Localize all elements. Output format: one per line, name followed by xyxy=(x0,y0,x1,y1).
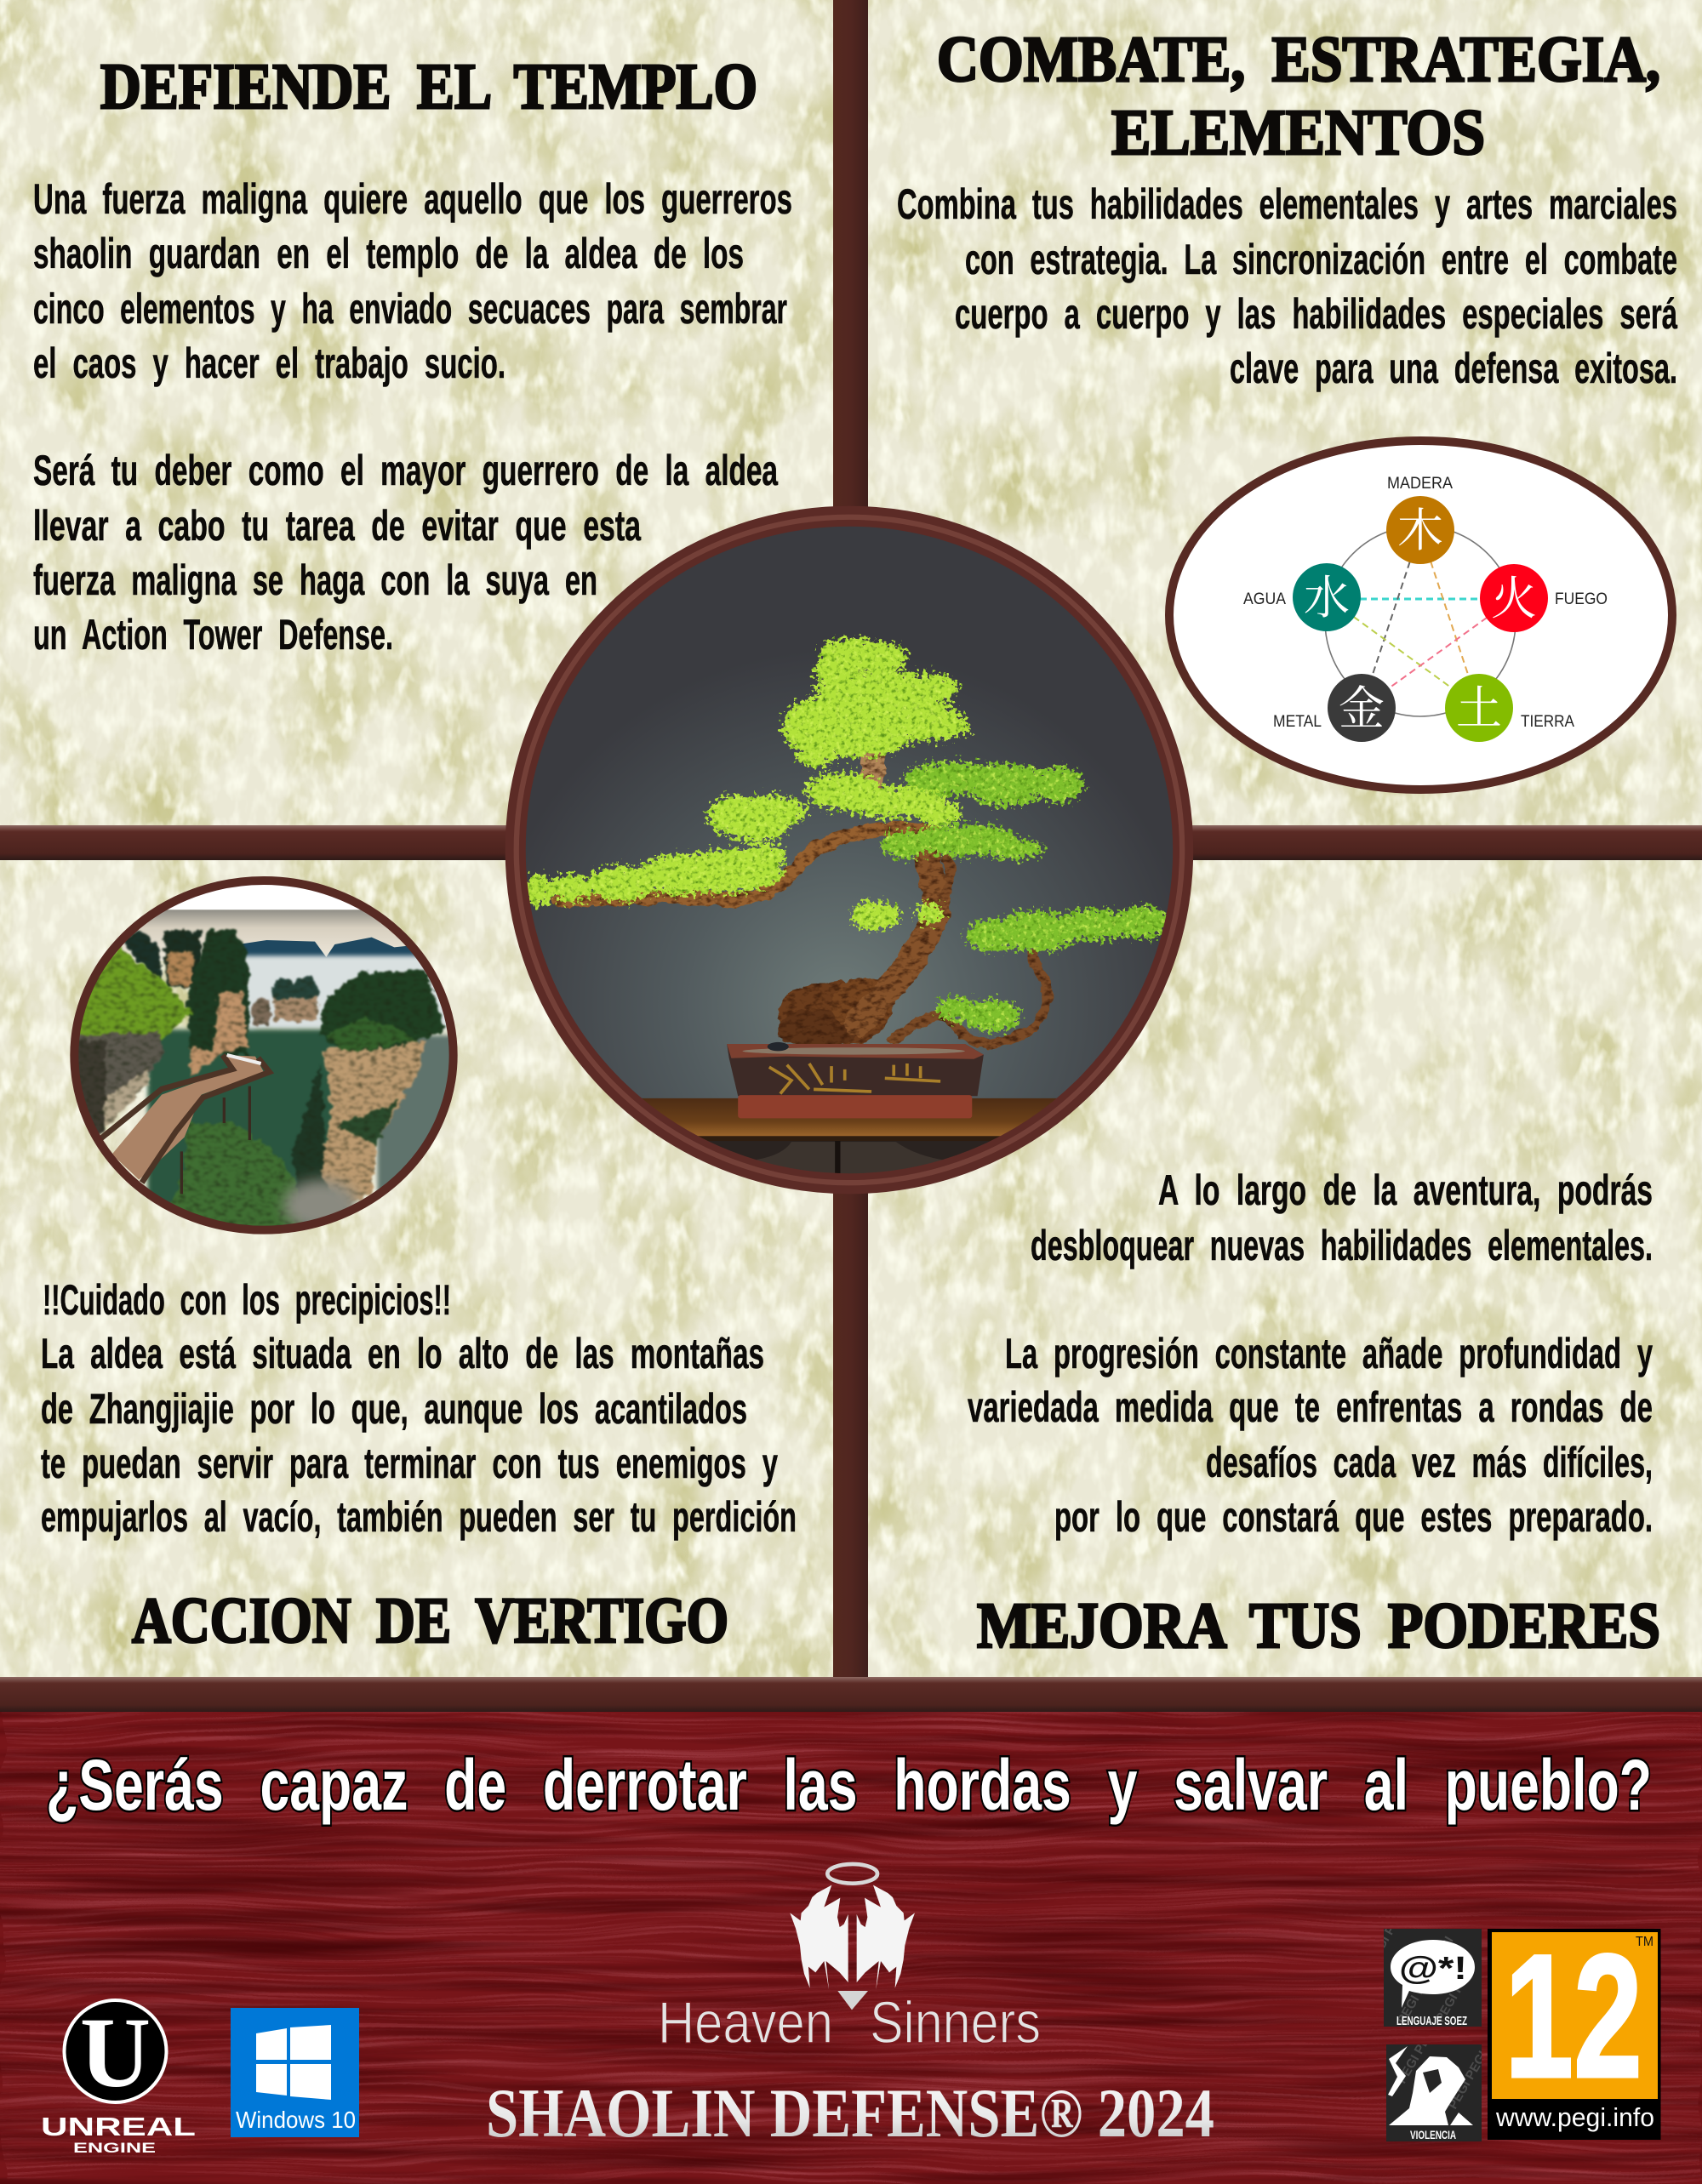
central image: bonsai xyxy=(502,502,1200,1200)
text block xyxy=(41,1276,797,1541)
heading: ELEMENTOS xyxy=(1111,97,1485,168)
far mountains xyxy=(238,938,448,967)
pegi: lenguaje soez: @*! xyxy=(1399,1951,1467,1987)
panel: combate, estrategia, elementos xyxy=(897,24,1677,392)
wordmark: UNREAL xyxy=(41,2112,196,2141)
text block xyxy=(33,175,792,659)
right haze xyxy=(377,1035,462,1234)
fist icon xyxy=(1388,2046,1473,2125)
heading xyxy=(937,24,1660,168)
text block: fuerza maligna se haga con la suya en xyxy=(33,556,597,604)
ring frame xyxy=(506,507,1192,1193)
pegi: lenguaje soez xyxy=(1365,1874,1482,2028)
text block: Una fuerza maligna quiere aquello que los guerreros xyxy=(33,175,792,223)
node: madera: 木 xyxy=(1397,505,1443,556)
left foliage and cliff xyxy=(68,947,191,1134)
panel: mejora tus poderes xyxy=(968,1166,1660,1662)
foliage bright tiers xyxy=(523,638,969,930)
green valley xyxy=(147,1029,346,1234)
node: tierra: 土 xyxy=(1456,683,1502,734)
mist valley xyxy=(232,955,460,1029)
panel: defiende el templo xyxy=(33,51,792,659)
bonsai scene xyxy=(528,633,1166,1174)
pegi: age rating 12: www.pegi.info xyxy=(1495,2102,1654,2132)
circular photo: zhangjiajie xyxy=(68,876,462,1234)
emblem: halo and wings xyxy=(790,1864,915,2010)
labels: FUEGO xyxy=(1555,590,1608,608)
right pillar xyxy=(292,970,445,1208)
background: parchment xyxy=(0,0,1702,1719)
logo: unreal engine: U xyxy=(80,1997,151,2108)
white cap and sky xyxy=(68,876,460,910)
table xyxy=(642,1098,1057,1174)
pot xyxy=(727,1042,984,1118)
wordmark: Heaven xyxy=(658,1989,833,2056)
distant pillars xyxy=(251,977,318,1027)
text block: !!Cuidado con los precipicios!! xyxy=(43,1276,451,1324)
oval frame xyxy=(1169,441,1672,790)
pegi pattern: PEGI PEGI xyxy=(1433,1962,1477,2025)
text block: La aldea está situada en lo alto de las montañas xyxy=(41,1330,764,1377)
fog xyxy=(283,1180,357,1231)
text block: el caos y hacer el trabajo sucio. xyxy=(33,339,505,387)
emblem xyxy=(65,2000,167,2102)
text block xyxy=(897,180,1677,392)
dashed connections xyxy=(1327,530,1514,708)
divider frame xyxy=(0,0,1702,1712)
text block: Será tu deber como el mayor guerrero de la aldea xyxy=(33,447,779,494)
pegi: age rating 12: TM xyxy=(1636,1935,1653,1949)
game title: SHAOLIN DEFENSE® 2024 xyxy=(486,2074,1214,2152)
logo: heaven sinners: Sinners xyxy=(870,1989,1041,2056)
backdrop xyxy=(540,699,1145,1098)
background: red wood band xyxy=(0,1712,1702,2184)
node: fuego xyxy=(1480,564,1548,632)
pegi pattern xyxy=(1365,1874,1477,2027)
text block: shaolin guardan en el templo de la aldea de los xyxy=(33,230,744,277)
node: metal: 金 xyxy=(1339,683,1385,734)
labels: MADERA xyxy=(1387,475,1453,493)
cycle ring xyxy=(1325,526,1516,716)
central pillar xyxy=(187,930,249,1078)
oval frame xyxy=(74,881,454,1230)
logo: unreal engine xyxy=(41,1997,196,2156)
lower foliage xyxy=(159,1123,306,1234)
panel: accion de vertigo xyxy=(41,876,797,1657)
logo: heaven sinners xyxy=(658,1864,1041,2056)
labels: AGUA xyxy=(1243,590,1286,608)
node: agua xyxy=(1293,563,1361,631)
diagram: five elements xyxy=(1169,441,1672,790)
walkway xyxy=(100,1055,270,1194)
pegi pattern: PEGI PEGI PEGI xyxy=(1365,1874,1426,1967)
text block: llevar a cabo tu tarea de evitar que esta xyxy=(33,502,642,550)
pegi pattern xyxy=(1395,2019,1507,2112)
text block xyxy=(968,1166,1653,1541)
logo: windows 10: Windows 10 xyxy=(236,2107,356,2133)
node: fuego: 火 xyxy=(1491,573,1537,624)
pegi: lenguaje soez: LENGUAJE SOEZ xyxy=(1396,2014,1467,2028)
foliage darker tiers xyxy=(882,761,1171,1032)
ring stroke xyxy=(516,516,1183,1183)
labels: TIERRA xyxy=(1521,713,1574,731)
heading: ACCION DE VERTIGO xyxy=(132,1585,728,1657)
heading: DEFIENDE EL TEMPLO xyxy=(100,51,757,123)
node: tierra xyxy=(1445,674,1513,742)
pegi pattern: PEGI PEGI PEGI xyxy=(1395,1934,1456,2027)
back pillar xyxy=(122,930,202,987)
labels xyxy=(1243,475,1608,731)
pegi: violencia: VIOLENCIA xyxy=(1410,2128,1456,2141)
pegi pattern: PEGI PEGI PEGI xyxy=(1446,2019,1507,2112)
text block: de Zhangjiajie por lo que, aunque los acantilados xyxy=(41,1385,747,1433)
text block: un Action Tower Defense. xyxy=(33,611,393,659)
text block: cinco elementos y ha enviado secuaces para sembrar xyxy=(33,285,787,333)
pegi: age rating 12: 12 xyxy=(1505,1918,1642,2114)
labels: METAL xyxy=(1273,713,1322,731)
pegi: violencia xyxy=(1386,2019,1507,2141)
pegi: age rating 12 xyxy=(1488,1918,1661,2140)
trunk and branches xyxy=(560,736,1048,1049)
speech bubble xyxy=(1391,1940,1475,2008)
text block: empujarlos al vacío, también pueden ser tu perdición xyxy=(41,1493,797,1541)
pegi pattern: PEGI PEGI xyxy=(1395,2023,1439,2086)
text block: te puedan servir para terminar con tus enemigos y xyxy=(41,1440,778,1487)
node: agua: 水 xyxy=(1304,573,1350,624)
logo: windows 10 xyxy=(231,2008,359,2137)
node: metal xyxy=(1328,674,1396,742)
logo: unreal engine: ENGINE xyxy=(73,2140,156,2156)
node: madera xyxy=(1386,496,1454,564)
window panes xyxy=(256,2025,331,2100)
